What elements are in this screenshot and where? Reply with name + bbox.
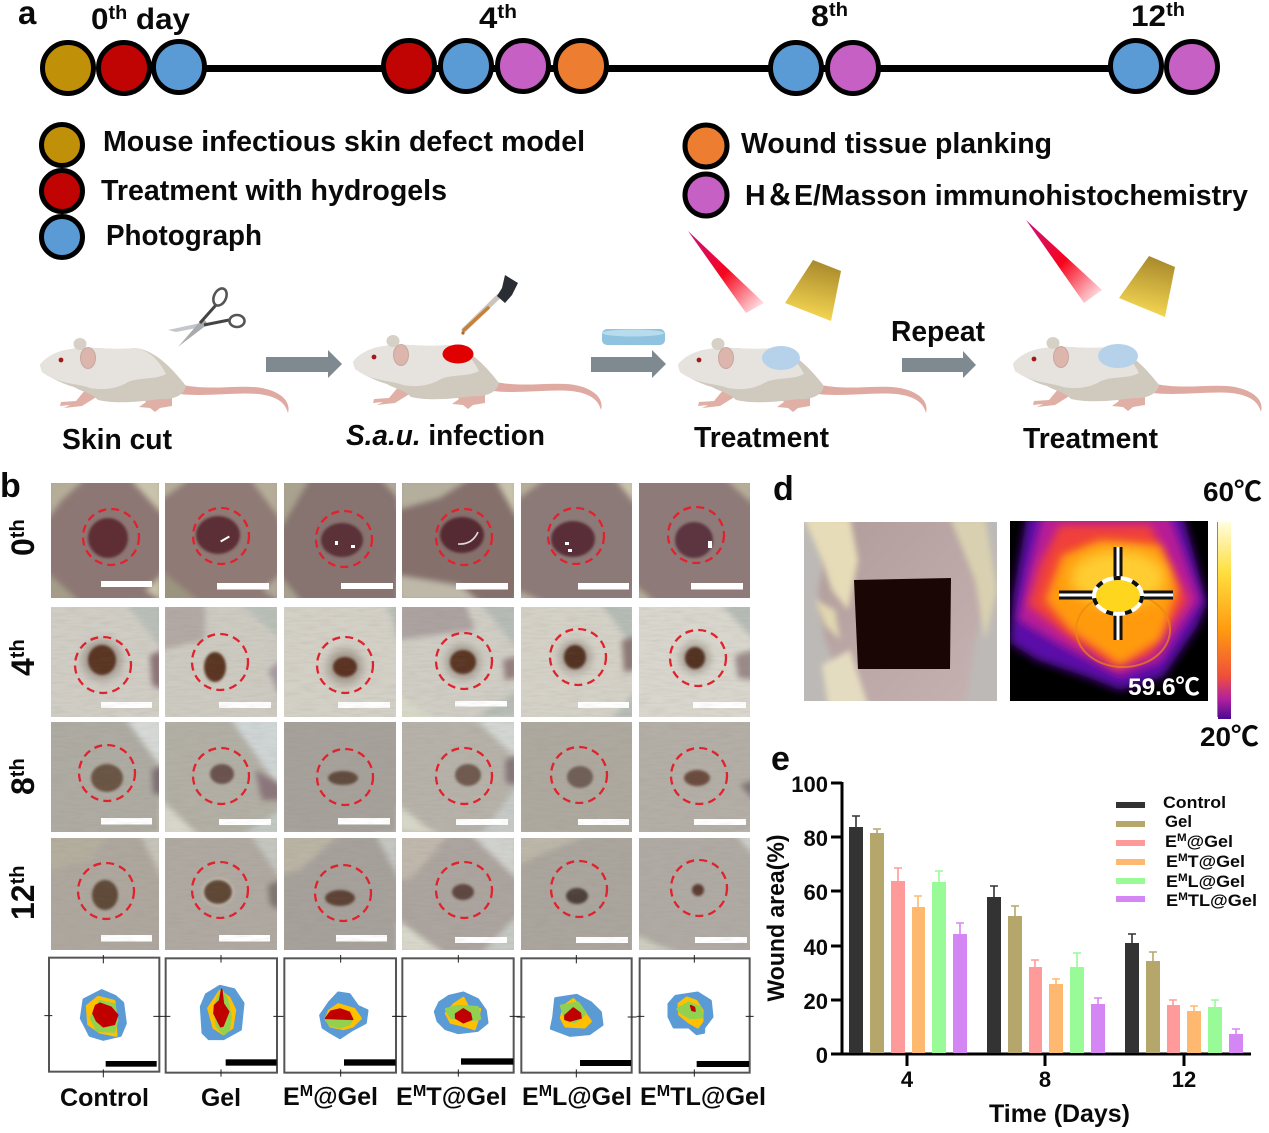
icon: mouse, treatment step [678,338,927,413]
icon: gold film 2 [1119,256,1175,317]
chart legend: Control [1163,793,1226,812]
legend: procedure colour key: Photograph [106,220,262,252]
group label EM@Gel: M [300,1083,313,1100]
group label EMT@Gel: M [413,1083,426,1100]
panel label d: d [773,470,794,508]
timeline day 0 markers: 0 [91,3,108,36]
scale label 60C: 60℃ [1203,477,1262,507]
icon: gold film 1 [785,260,841,321]
x axis: 4 [901,1067,914,1092]
crosshair marker [1059,547,1173,640]
chart legend: E [1166,852,1177,871]
group label EMT@Gel: T@Gel [426,1083,507,1111]
photo row: day 0 [47,479,754,602]
y axis: 0 [816,1043,828,1068]
group label EM@Gel: E [283,1083,300,1111]
row label 4th: th [7,639,29,658]
timeline day 0 markers: th [108,3,127,24]
wound trace: Gel [163,955,289,1077]
row label 8th: th [7,758,29,777]
group label Control: Control [60,1084,149,1112]
group label Gel: Gel [201,1084,241,1112]
timeline day 0 markers [42,3,204,94]
group label EMTL@Gel: E [640,1083,657,1111]
wound trace: EMT@Gel [393,955,520,1077]
timeline day 12 markers: th [1166,0,1185,21]
timeline axis [180,65,1140,72]
group label EML@Gel: M [539,1083,552,1100]
chart legend: M [1178,872,1188,884]
icon: scissors [168,286,244,347]
legend: procedure colour key: Mouse infectious skin defect model [103,126,585,158]
chart legend: E [1165,832,1176,851]
icon: mouse, repeated treatment step [1013,337,1262,412]
caption: S.a.u. infection: S.a.u. infection [346,420,545,452]
arrow: step 2 to step 3 [591,350,666,378]
wound trace: EML@Gel [517,955,637,1077]
timeline day 12 markers: 12 [1131,0,1164,33]
panel b: wound photographs and traces [0,467,766,1112]
x axis: 12 [1172,1067,1196,1092]
row label 8th: 8 [5,777,41,795]
panel d: photothermal imaging [773,470,1262,752]
photo: mouse with dark patch [804,515,997,705]
y axis title: Wound area(%) [763,834,790,1002]
y axis: 20 [804,989,828,1014]
icon: mouse, infection step [353,335,602,410]
thermal image [1010,515,1208,701]
row label 0th: th [7,519,29,538]
panel a: experimental timeline and workflow [18,0,1262,456]
bars: day 8 [987,886,1105,1053]
bars: day 12 [1125,934,1243,1053]
group label EMTL@Gel: M [657,1083,670,1100]
chart legend: E [1166,891,1177,910]
row label 12th: 12 [5,884,41,920]
group label EML@Gel: L@Gel [552,1083,632,1111]
icon: dropper [461,275,518,335]
chart legend: TL@Gel [1188,891,1257,910]
chart legend: E [1166,872,1177,891]
scale label 20C: 20℃ [1200,722,1259,752]
colour scale bar [1217,522,1231,719]
wound trace: EMTL@Gel [637,955,754,1077]
timeline day 4 markers: 4 [479,2,496,35]
row label 12th: th [7,866,29,884]
temperature readout: 59.6℃ [1128,674,1200,701]
y axis: 60 [804,880,828,905]
group label EMT@Gel: E [396,1083,413,1111]
chart legend [1116,793,1257,910]
caption: treatment repeat: Treatment [1023,423,1158,455]
icon: laser beam 2 [1026,220,1102,303]
arrow: repeat [902,351,976,378]
y axis [791,772,842,1068]
chart legend: Gel [1165,812,1192,831]
chart legend: @Gel [1187,832,1233,851]
icon: hydrogel dish [602,329,665,345]
row label 0th: 0 [5,538,41,556]
x axis: 8 [1039,1067,1051,1092]
y axis: 100 [791,772,828,797]
caption: repeat: Repeat [891,316,985,348]
x axis [831,1054,1251,1092]
timeline day 0 markers: day [127,3,190,36]
wound trace: Control [44,955,163,1077]
arrow: step 1 to step 2 [266,350,342,378]
timeline day 8 markers [770,0,878,94]
legend: procedure colour key: Treatment with hydrogels [101,175,447,207]
timeline day 4 markers [384,2,606,92]
wound trace: EM@Gel [284,955,400,1077]
icon: mouse, skin cut step [40,338,289,413]
y axis: 40 [804,935,828,960]
panel e: wound area bar chart [763,740,1257,1128]
caption: treatment: Treatment [694,422,829,454]
x axis title: Time (Days) [989,1100,1130,1128]
panel label e: e [771,740,790,778]
legend: procedure colour key [42,124,1248,258]
y axis: 80 [804,826,828,851]
chart legend: L@Gel [1188,872,1245,891]
icon: laser beam 1 [688,231,764,313]
group label EM@Gel: @Gel [313,1083,378,1111]
caption: skin cut: Skin cut [62,424,172,456]
panel label b: b [0,467,21,505]
photo row: day 12 [47,834,754,954]
photo row: day 8 [51,718,754,836]
legend: procedure colour key: Wound tissue planking [741,128,1052,160]
photo row: day 4 [51,603,754,721]
chart legend: T@Gel [1188,852,1245,871]
group label EMTL@Gel: TL@Gel [670,1083,766,1111]
row label 4th: 4 [5,658,41,676]
timeline day 4 markers: th [497,2,517,23]
timeline day 12 markers [1110,0,1218,92]
bars: day 4 [849,816,967,1053]
group label EML@Gel: E [522,1083,539,1111]
chart legend: M [1178,852,1188,864]
legend: procedure colour key: H＆E/Masson immunohistochemistry [745,180,1248,212]
timeline day 8 markers: th [829,0,848,21]
chart legend: M [1177,832,1187,844]
chart legend: M [1178,891,1188,903]
timeline day 8 markers: 8 [811,0,828,33]
